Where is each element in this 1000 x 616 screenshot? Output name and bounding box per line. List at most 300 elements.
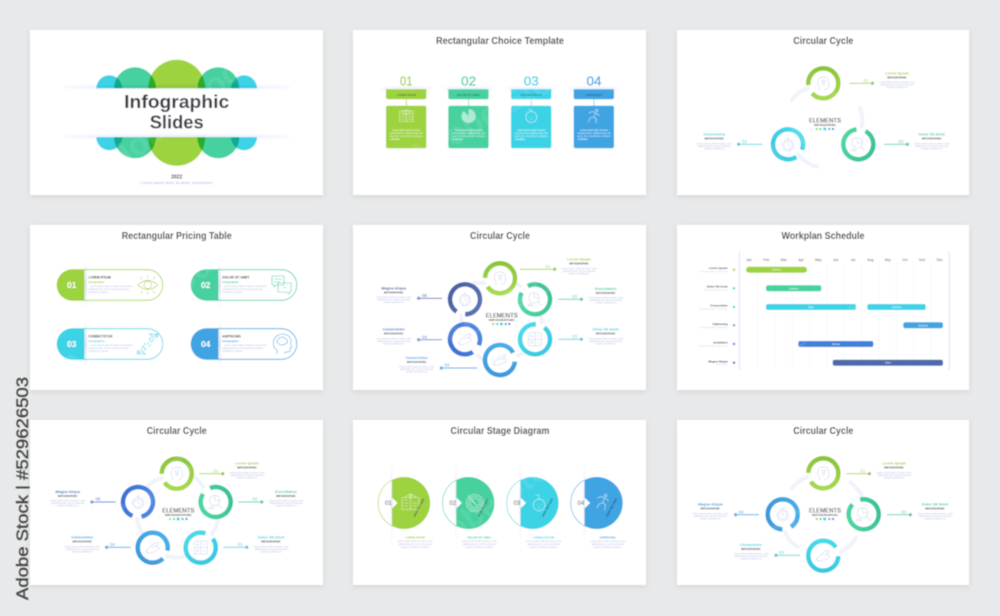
pricing pill 01: LOREM IPSUM — [88, 276, 111, 280]
callout 03: tempor incididunt ut — [595, 342, 616, 345]
callout 01: tempor incididunt ut — [887, 86, 908, 89]
stage 04: adipiscing elit, sed do eiusmod — [591, 543, 625, 546]
row sublabels: Lorem ipsum dolor sit amet cons — [699, 270, 728, 273]
callout 05 — [50, 490, 116, 508]
pricing pill 03: Infographic — [88, 339, 105, 343]
pricing pill 03 — [57, 321, 163, 367]
month labels: Jun — [833, 258, 839, 262]
pricing pill 02: Lorem ipsum dolor sit amet, consectetur — [224, 285, 267, 288]
row sublabels: Lorem ipsum — [716, 364, 728, 366]
callout 04: Consectetur — [71, 536, 94, 540]
panel: rectangular pricing table — [30, 225, 323, 390]
callout 04: INFOGRAPHIC — [73, 540, 92, 544]
heading: Circular Cycle — [147, 426, 207, 437]
callout 03: INFOGRAPHIC — [741, 547, 761, 551]
card 02: incididunt — [452, 138, 463, 141]
month labels: Aug — [867, 258, 873, 262]
callout 02: 02 — [572, 294, 578, 299]
ring 02 — [196, 483, 235, 521]
panel: rectangular choice template — [353, 30, 646, 195]
callout 01: adipiscing elit, sed do eiusmod — [881, 84, 914, 86]
callout 05: adipiscing elit, sed do eiusmod — [377, 340, 411, 343]
callout 03 — [223, 536, 289, 553]
bar: adipiscing — [903, 322, 943, 328]
month labels: Jan — [746, 258, 752, 262]
callout 05: Lorem ipsum dolor sit amet, cons — [376, 337, 412, 340]
month labels: Sep — [885, 258, 891, 262]
heading: Circular Cycle — [470, 231, 530, 242]
watermark overlay — [55, 42, 924, 572]
callout 03: Lorem ipsum dolor sit amet, cons — [697, 142, 733, 145]
icon: pie dial — [466, 494, 483, 512]
callout 04: Consectetur — [406, 356, 428, 360]
card 01: 01 — [400, 74, 413, 88]
callout 02 — [887, 503, 953, 520]
callout 01: adipiscing elit, sed do eiusmod — [563, 270, 596, 273]
pricing pill 02: DOLOR SIT AMET — [222, 276, 250, 280]
bar: adipiscing: Andrew — [918, 323, 929, 327]
callout 01: INFOGRAPHIC — [887, 75, 907, 79]
card 02: DOLOR SIT AMET — [457, 93, 481, 97]
card 03: Lorem ipsum dolor sit amet — [517, 129, 546, 132]
stage 02 — [442, 460, 498, 549]
card 03: CONSECTETUR — [521, 93, 542, 97]
stage 03: Lorem ipsum dolor sit amet, cons — [526, 540, 562, 543]
callout 02: Lorem ipsum dolor sit amet, cons — [268, 500, 304, 503]
ring 03 — [180, 527, 222, 569]
callout 02: Dolor Sit Amet — [919, 133, 946, 137]
pricing pill 01 — [57, 262, 163, 308]
panel: circular cycle four steps — [677, 420, 969, 585]
heading: Workplan Schedule — [782, 231, 865, 242]
watermark overlay: Adobe Stock — [403, 430, 584, 572]
watermark overlay: Adobe Stock — [743, 240, 924, 382]
callout 03: adipiscing elit, sed do eiusmod — [589, 340, 623, 343]
ring 01 — [161, 458, 192, 489]
callout 02: INFOGRAPHIC — [276, 494, 296, 498]
bar: lorem ipsum — [746, 267, 807, 273]
row labels: Magna Aliqua — [708, 359, 728, 363]
callout 03 — [733, 543, 800, 561]
callout 03: Lorem ipsum dolor sit amet, cons — [733, 553, 769, 556]
callout 03: INFOGRAPHIC — [596, 332, 615, 336]
callout 02: Lorem ipsum dolor sit amet, cons — [588, 297, 624, 300]
callout 02: INFOGRAPHIC — [596, 291, 615, 295]
centre label: ELEMENTS — [809, 117, 841, 124]
card 04 — [568, 74, 620, 148]
callout 02: tempor incididunt ut — [276, 505, 297, 508]
callout 02: tempor incididunt ut — [921, 147, 942, 150]
callout 04: Lorem ipsum dolor sit amet, cons — [399, 366, 435, 369]
ring 04 — [132, 527, 174, 569]
callout 01: Lorem ipsum dolor sit amet, cons — [561, 267, 597, 270]
ring 04 — [767, 499, 798, 530]
callout 02: tempor incididunt ut — [595, 302, 616, 305]
callout 03: 03 — [572, 334, 578, 339]
row labels: Consectetur — [710, 303, 729, 307]
ring 03 with icon — [767, 124, 809, 165]
card 01: Lorem ipsum dolor sit amet — [392, 129, 421, 132]
card 01: incididunt — [390, 138, 400, 141]
callout 05: INFOGRAPHIC — [384, 332, 403, 336]
callout 01: tempor incididunt ut — [569, 272, 590, 275]
pricing pill 03: adipiscing elit, sed do eiusmod tempor — [88, 347, 129, 350]
callout 01: Lorem Ipsum — [235, 462, 260, 466]
stock identifier text: Adobe Stock | #529626503 — [13, 377, 32, 600]
month labels: Jul — [851, 258, 855, 262]
card 04: ···· — [591, 124, 597, 128]
card 02: Lorem ipsum dolor sit amet — [455, 129, 483, 132]
callout 02: adipiscing elit, sed do eiusmod — [919, 515, 952, 518]
card 03: consectetur adipiscing elit — [515, 132, 548, 135]
callout 01: 01 — [546, 264, 551, 269]
card 04: consectetur adipiscing elit — [577, 132, 611, 135]
callout 04: INFOGRAPHIC — [407, 360, 426, 364]
callout 01: tempor incididunt ut — [237, 476, 258, 479]
pricing pill 01: incididunt ut labore — [88, 291, 109, 294]
callout 01 — [199, 462, 265, 479]
callout 01: adipiscing elit, sed do eiusmod — [878, 474, 911, 477]
callout 01: Lorem ipsum dolor sit amet, cons — [876, 471, 912, 474]
callout 01: 01 — [861, 468, 866, 473]
pricing pill 02 — [191, 262, 297, 308]
bar: dolor sit amet — [766, 285, 821, 291]
callout 04: adipiscing elit, sed do eiusmod — [694, 515, 727, 518]
ring 02 — [846, 497, 881, 532]
card 02: consectetur adipiscing elit — [452, 132, 485, 135]
callout 06 — [376, 286, 442, 304]
stage 02: DATA TEXT BOX — [477, 497, 490, 517]
ring 01 — [484, 263, 516, 294]
bar: magna aliqua: Sam — [885, 361, 892, 365]
bar: consectetur first: Sam — [808, 305, 815, 309]
connecting ribbons — [461, 282, 542, 360]
stage 03: 03 — [513, 501, 521, 507]
pricing pill 02: 02 — [201, 280, 211, 290]
band glow top — [62, 86, 292, 88]
callout 06: Lorem ipsum dolor sit amet, cons — [376, 296, 412, 299]
icon: code arrows — [137, 334, 158, 354]
callout 02: Lorem ipsum dolor sit amet, cons — [917, 512, 953, 515]
month labels: Dec — [937, 258, 943, 262]
callout 06: adipiscing elit, sed do eiusmod — [377, 298, 411, 301]
band glow bottom — [62, 135, 292, 138]
callout 02: adipiscing elit, sed do eiusmod — [915, 145, 949, 148]
cover title — [124, 91, 229, 133]
card 01: ···· — [404, 124, 409, 128]
gantt grid — [739, 252, 949, 370]
card 04: Lorem ipsum dolor sit amet — [580, 129, 608, 132]
card 03: sed do eiusmod tempor — [515, 135, 548, 138]
year and subtitle: 2022 — [171, 175, 182, 181]
icon: open book eye — [402, 494, 419, 510]
centre label: ELEMENTS — [162, 508, 194, 515]
year and subtitle: Lorem ipsum dolor sit amet, consectetur — [141, 181, 214, 185]
icon: chat bubbles — [272, 276, 291, 294]
stage 04: tempor incididunt ut labore — [594, 546, 622, 549]
callout 05: adipiscing elit, sed do eiusmod — [51, 502, 85, 505]
bar: consectetur second: Andrew — [892, 305, 902, 309]
row sublabels — [699, 270, 728, 366]
card 03: 03 — [524, 74, 539, 88]
connecting ribbons — [137, 476, 218, 558]
watermark overlay: Adobe Stock — [743, 420, 924, 562]
callout 04 — [65, 536, 131, 553]
pricing pill 03: Lorem ipsum dolor sit amet, consectetur — [90, 344, 133, 347]
callout 01: Lorem Ipsum — [885, 71, 910, 75]
bar: consectetur first — [766, 304, 856, 310]
callout 03: INFOGRAPHIC — [705, 137, 724, 141]
callout 02: INFOGRAPHIC — [925, 507, 945, 511]
row markers — [733, 268, 735, 364]
stage 04: 04 — [578, 501, 585, 507]
callout 02: Exercitation — [595, 287, 617, 291]
callout 02: tempor incididunt ut — [925, 517, 946, 520]
callout 03: Consectetur — [703, 133, 726, 137]
card 04: ADIPISCING — [586, 93, 602, 97]
stage 01: adipiscing elit, sed do eiusmod — [399, 543, 432, 546]
card 01: LOREM IPSUM — [397, 93, 417, 97]
callout 04: Lorem ipsum dolor sit amet, cons — [693, 512, 729, 515]
pricing pill 01: 01 — [67, 280, 77, 290]
icon: book — [400, 110, 413, 122]
ring 05 — [445, 319, 485, 360]
pricing pill 01: Infographic — [88, 280, 105, 284]
callout 03: tempor incididunt ut — [741, 558, 762, 561]
panel: circular cycle five steps — [30, 420, 323, 585]
stage 03: CONSECTETUR — [533, 535, 554, 539]
pricing pill 03: CONSECTETUR — [88, 335, 113, 339]
stage 04 — [571, 460, 626, 549]
pricing pill 04: incididunt ut labore — [222, 350, 243, 353]
callout 02 — [558, 287, 624, 305]
connecting ribbons — [792, 88, 862, 167]
ring 04 — [483, 343, 517, 377]
pricing pill 04: 04 — [201, 339, 211, 349]
panel: circular cycle three steps — [677, 30, 969, 195]
ring 01 with icon — [807, 67, 840, 100]
centre label — [809, 508, 841, 520]
card 01: sed do eiusmod tempor — [390, 135, 423, 138]
heading: Circular Cycle — [793, 426, 854, 437]
callout 05: 05 — [96, 497, 101, 502]
callout 01: 01 — [864, 78, 869, 83]
row labels: Incididunt — [713, 341, 728, 345]
callout 05: INFOGRAPHIC — [58, 494, 77, 498]
callout 02: Dolor Sit Amet — [922, 503, 949, 507]
callout 03: Dolor Sit Amet — [258, 536, 285, 540]
watermark overlay: Adobe Stock — [75, 407, 252, 556]
centre label: INFOGRAPHIC — [814, 123, 837, 127]
row sublabels: Lorem ipsum dolor sit amet — [704, 289, 728, 292]
heading: Rectangular Pricing Table — [122, 231, 232, 242]
card 02: 02 — [461, 74, 476, 88]
callout 04: adipiscing elit, sed do eiusmod — [400, 368, 434, 371]
stage 03: adipiscing elit, sed do eiusmod — [527, 543, 560, 546]
card 02 — [443, 74, 495, 148]
callout 05: tempor incididunt ut — [383, 342, 404, 345]
panel: circular stage diagram — [353, 420, 646, 585]
callout 03: adipiscing elit, sed do eiusmod — [735, 555, 768, 558]
stage 03 — [507, 460, 562, 549]
ring 02 — [515, 279, 555, 319]
centre label: ELEMENTS — [486, 312, 518, 320]
stage 04: Lorem ipsum dolor sit amet, cons — [590, 540, 626, 543]
bar: consectetur second — [867, 304, 926, 310]
card 04: sed do eiusmod tempor — [577, 135, 611, 138]
stage 02: tempor incididunt ut labore — [465, 546, 494, 549]
callout 03 — [558, 328, 624, 345]
watermark overlay: Adobe Stock — [735, 42, 912, 191]
callout 03: tempor incididunt ut — [261, 550, 282, 553]
callout 02: INFOGRAPHIC — [922, 137, 941, 141]
connecting ribbons — [785, 477, 863, 552]
callout 03: tempor incididunt ut — [704, 147, 725, 150]
panel: workplan schedule — [677, 225, 969, 390]
ring 02 with icon — [838, 124, 879, 165]
callout 04: INFOGRAPHIC — [701, 507, 720, 511]
row labels: Lorem Ipsum — [709, 266, 728, 270]
card 02: sed do eiusmod tempor — [452, 135, 485, 138]
row sublabels: Lorem ipsum dolor sit amet cons — [699, 345, 728, 348]
callout 01: Lorem ipsum dolor sit amet, cons — [879, 81, 915, 84]
callout 01 — [849, 71, 915, 89]
callout 06: tempor incididunt ut — [383, 301, 404, 304]
stage 01: DATA TEXT BOX — [412, 497, 426, 517]
callout 03: Lorem ipsum dolor sit amet, cons — [588, 337, 624, 340]
heading: Circular Stage Diagram — [450, 426, 550, 437]
callout 04 — [399, 356, 477, 374]
watermark overlay: Adobe Stock — [401, 46, 588, 175]
heading: Rectangular Choice Template — [436, 36, 564, 47]
year and subtitle — [141, 175, 214, 185]
watermark overlay: Adobe Stock — [401, 246, 588, 375]
callout 03 — [697, 133, 762, 150]
ring 03 — [514, 318, 556, 360]
stage 03: DATA TEXT BOX — [541, 497, 554, 517]
callout 02: adipiscing elit, sed do eiusmod — [589, 299, 623, 302]
callout 03: adipiscing elit, sed do eiusmod — [255, 548, 288, 551]
top half circles — [96, 60, 257, 88]
stage 03: tempor incididunt ut labore — [529, 546, 558, 549]
callout 04: Magna Aliqua — [698, 503, 723, 507]
bar: incididunt — [798, 341, 873, 347]
callout 03: adipiscing elit, sed do eiusmod — [698, 145, 731, 148]
panel: circular cycle six steps — [353, 225, 646, 390]
stage 01: 01 — [385, 501, 392, 507]
bar: incididunt: James — [832, 342, 841, 346]
card 01 — [380, 74, 432, 148]
callout 05: tempor incididunt ut — [57, 505, 78, 508]
ring 01 — [808, 458, 839, 489]
row labels — [707, 266, 729, 363]
callout 02: 02 — [253, 497, 258, 502]
month labels: May — [815, 258, 822, 262]
pricing pill 02: adipiscing elit, sed do eiusmod tempor — [222, 288, 263, 291]
callout 02 — [238, 490, 304, 508]
panel: cover slide — [30, 30, 323, 195]
callout 05: Lorem ipsum dolor sit amet, cons — [50, 500, 86, 503]
pricing pill 03: 03 — [67, 339, 77, 349]
card 03: incididunt — [515, 138, 525, 141]
callout 06: Magna Aliqua — [381, 286, 407, 290]
month labels: Feb — [763, 258, 769, 262]
callout 03: Dolor Sit Amet — [593, 328, 620, 332]
callout 03: INFOGRAPHIC — [261, 540, 281, 544]
icon: head with brain — [273, 334, 292, 354]
stage 04: ADIPISCING — [599, 535, 616, 539]
heading: Circular Cycle — [793, 36, 854, 47]
centre label: INFOGRAPHIC — [812, 513, 839, 517]
stage 02: 02 — [449, 501, 457, 507]
cover title: Infographic — [124, 91, 229, 112]
callout 04: 04 — [739, 509, 744, 514]
callout 01: 01 — [214, 468, 219, 473]
stage 01: Lorem ipsum dolor sit amet, cons — [397, 540, 433, 543]
callout 03: Consectetur — [740, 543, 763, 547]
centre label — [162, 508, 194, 520]
pricing pill 01: adipiscing elit, sed do eiusmod tempor — [88, 288, 129, 291]
month labels: Mar — [781, 258, 788, 262]
callout 01: Lorem Ipsum — [882, 462, 907, 466]
ring 05 — [118, 482, 158, 522]
callout 04: 04 — [110, 542, 115, 547]
callout 02: Lorem ipsum dolor sit amet, cons — [914, 142, 950, 145]
centre label: INFOGRAPHIC — [165, 513, 193, 517]
icon: apple — [526, 110, 537, 122]
callout 06: INFOGRAPHIC — [384, 290, 403, 294]
callout 01: INFOGRAPHIC — [237, 466, 257, 470]
callout 06: 06 — [422, 293, 427, 298]
month labels — [746, 258, 943, 262]
stage 02: DOLOR SIT AMET — [467, 535, 492, 539]
callout 02: Exercitation — [275, 490, 298, 494]
stage 02: Lorem ipsum dolor sit amet, cons — [462, 540, 498, 543]
centre label — [486, 312, 518, 325]
stage 01 — [378, 460, 433, 549]
pricing pill 04: adipiscing elit, sed do eiusmod tempor — [222, 347, 263, 350]
callout 02: adipiscing elit, sed do eiusmod — [270, 502, 303, 505]
bar: lorem ipsum: Steven — [772, 268, 781, 272]
pricing pill 02: Infographic — [222, 280, 239, 284]
centre label: INFOGRAPHIC — [489, 318, 516, 322]
card 04: 04 — [586, 74, 601, 88]
callout 04: Lorem ipsum dolor sit amet, cons — [65, 545, 101, 548]
pricing pill 03: incididunt ut labore — [88, 350, 109, 353]
callout 01: INFOGRAPHIC — [884, 466, 904, 470]
callout 01 — [846, 462, 912, 479]
watermark overlay: Adobe Stock — [55, 237, 232, 386]
card 02: ···· — [466, 124, 471, 128]
callout 05 — [376, 328, 442, 345]
pricing pill 04: Lorem ipsum dolor sit amet, consectetur — [224, 344, 267, 347]
month labels: Oct — [902, 258, 908, 262]
callout 01: Lorem Ipsum — [567, 258, 592, 262]
centre label: ELEMENTS — [809, 508, 841, 514]
card 04: incididunt — [578, 138, 588, 141]
pricing pill 01: Lorem ipsum dolor sit amet, consectetur — [90, 285, 133, 288]
callout 04: tempor incididunt ut — [72, 550, 93, 553]
callout 03: 03 — [238, 542, 243, 547]
row sublabels: Lorem ipsum dolor sit amet cons — [699, 307, 728, 310]
icon: pie dial — [462, 108, 476, 123]
centre label — [809, 117, 841, 130]
month labels: Nov — [919, 258, 926, 262]
month labels: Apr — [798, 258, 805, 262]
watermark overlay: Adobe Stock — [85, 42, 262, 191]
icon: runner — [597, 494, 609, 510]
callout 04: adipiscing elit, sed do eiusmod — [66, 548, 99, 551]
